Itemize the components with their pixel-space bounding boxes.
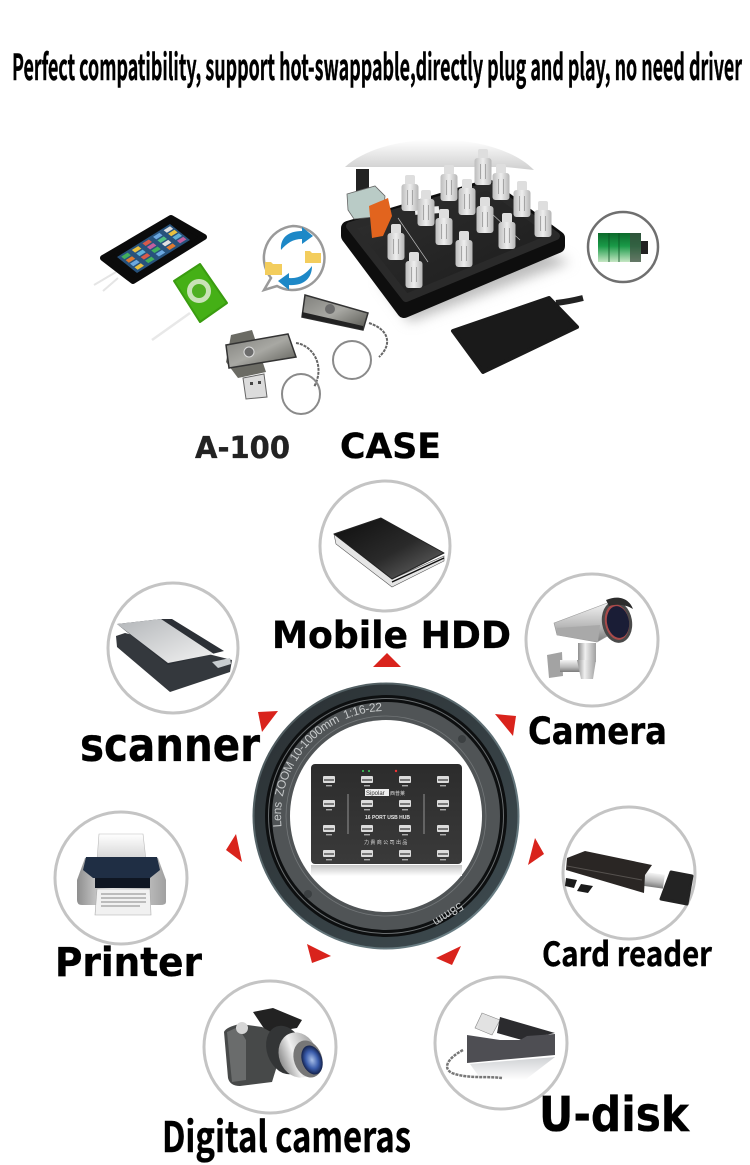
icon: smartphone bbox=[94, 218, 204, 291]
icon: green music player bbox=[152, 264, 227, 340]
icon: card reader bbox=[565, 851, 692, 904]
icon: flatbed scanner bbox=[116, 619, 232, 692]
icon: 16 port USB hub with plugs bbox=[347, 149, 570, 322]
circle bbox=[526, 574, 658, 706]
icon: USB hub front view: 16 PORT USB HUB bbox=[365, 815, 410, 821]
panel: scanner bbox=[80, 583, 260, 772]
label: Card reader bbox=[542, 928, 713, 976]
panel: central lens with hub bbox=[252, 682, 520, 950]
lens size marking: 58mm bbox=[430, 899, 466, 929]
lens engraving: Lens ZOOM 10-1000mm 1:16-22 bbox=[273, 702, 382, 827]
icon: power adapter bbox=[453, 298, 583, 372]
label: Digital cameras bbox=[162, 1104, 411, 1165]
circle bbox=[435, 977, 567, 1109]
case label: CASE bbox=[340, 427, 441, 467]
label: U-disk bbox=[539, 1087, 690, 1143]
circle bbox=[108, 583, 238, 713]
panel: mobile HDD bbox=[272, 481, 511, 657]
panel: usage scene bbox=[94, 140, 658, 467]
circle bbox=[563, 807, 695, 939]
label: Printer bbox=[55, 940, 202, 986]
arrows: red triangles around lens bbox=[226, 653, 544, 965]
wall shadow behind hub bbox=[345, 140, 534, 170]
panel: digital cameras bbox=[162, 981, 411, 1165]
label: scanner bbox=[80, 718, 260, 772]
icon: swivel flash drive bbox=[447, 1013, 555, 1080]
icon: USB hub front view: 力貴商公司出品 bbox=[364, 839, 409, 846]
icon: battery bbox=[588, 212, 658, 282]
icon: USB hub front view: 西普莱 bbox=[390, 790, 405, 797]
circle bbox=[204, 981, 336, 1113]
panel: card reader bbox=[542, 807, 713, 976]
case model label: A-100 bbox=[195, 431, 290, 466]
icon: sync bubble bbox=[264, 226, 324, 290]
icon: security camera bbox=[547, 598, 635, 679]
label: Camera bbox=[528, 710, 667, 753]
lens ring bbox=[252, 682, 520, 950]
panel: U-disk bbox=[435, 977, 690, 1143]
icon: USB hub front view: Sipolar bbox=[366, 791, 385, 797]
panel: camera bbox=[526, 574, 667, 753]
label: Mobile HDD bbox=[272, 614, 511, 657]
icon: digital camera bbox=[224, 1008, 328, 1086]
icon: hard drive bbox=[334, 518, 444, 587]
icon: inkjet printer bbox=[77, 834, 166, 915]
icon: USB hub front view bbox=[311, 764, 462, 876]
circle bbox=[55, 812, 187, 944]
icon: flash drive open bbox=[226, 330, 320, 414]
circle bbox=[320, 481, 450, 611]
icon: flash drive closed bbox=[302, 295, 387, 379]
panel: printer bbox=[55, 812, 202, 986]
